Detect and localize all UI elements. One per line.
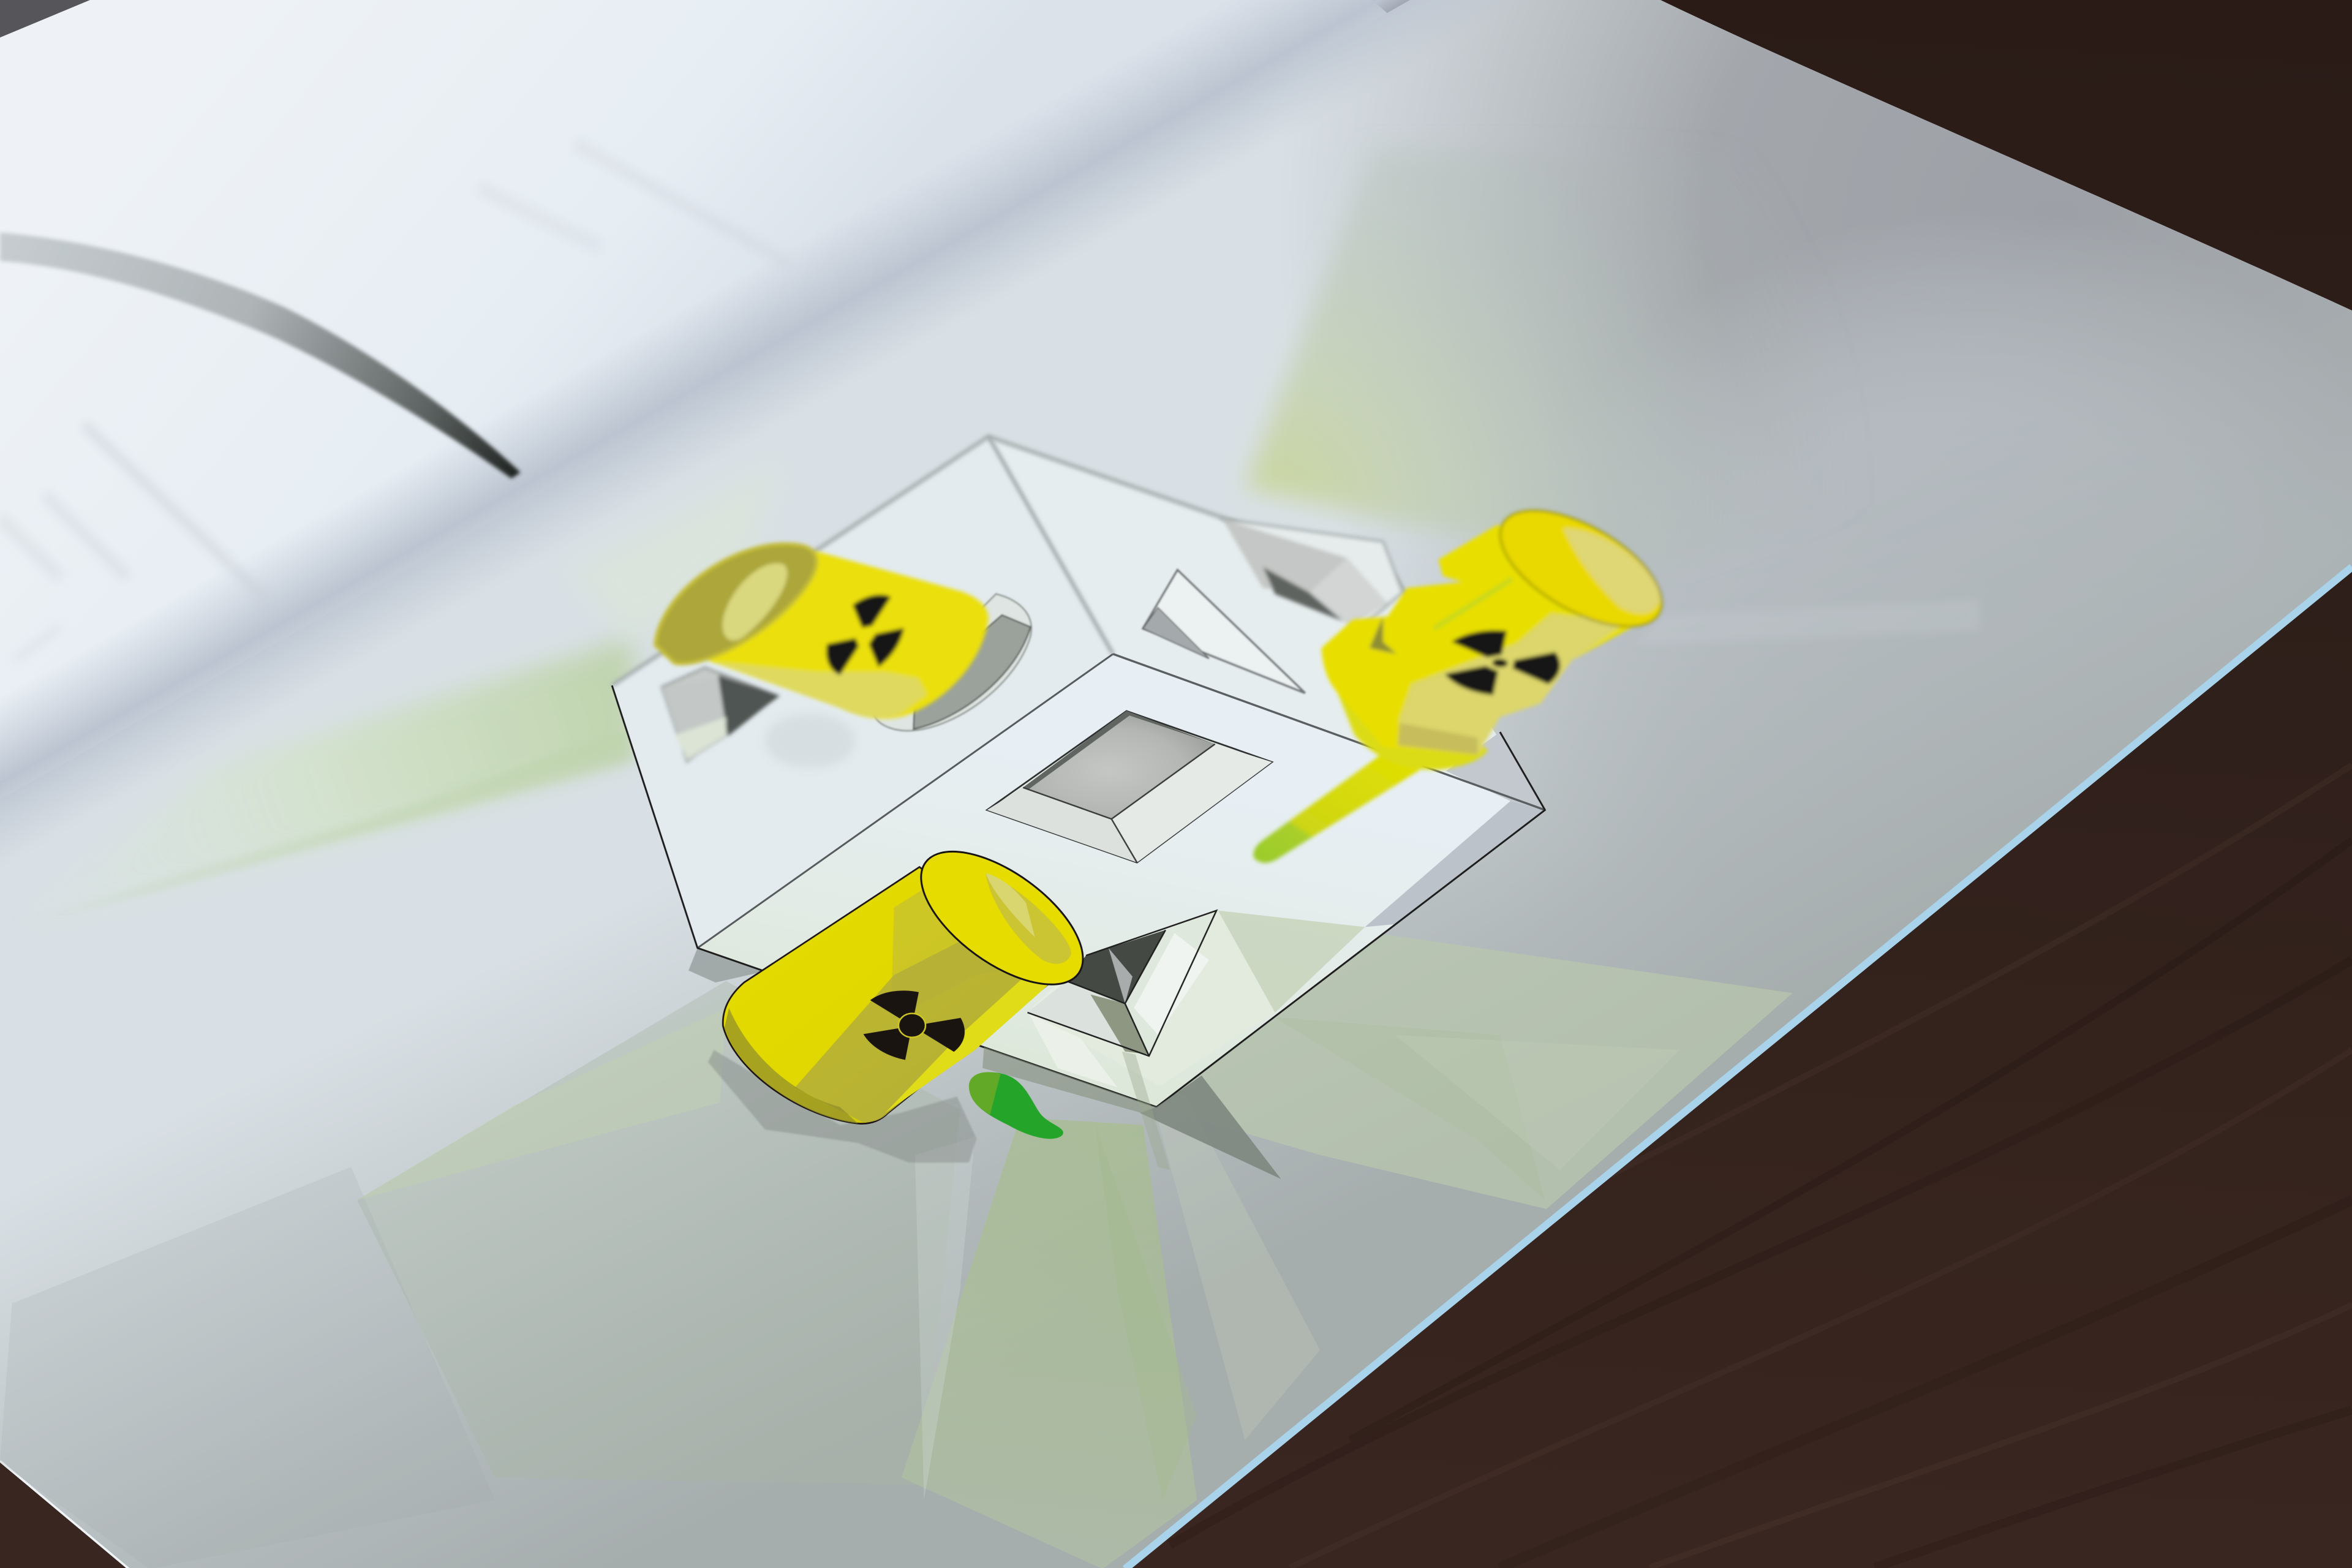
barrel 3 body — [723, 867, 1056, 1124]
barrel 3 lid — [899, 826, 1105, 1010]
pyramid grey beam — [1090, 995, 1149, 1055]
barrel cast shadow on page — [708, 1050, 976, 1163]
barrel 1: tilted barrel at upper left — [655, 545, 989, 718]
soft shadow of barrel 1 on the cube — [765, 714, 855, 768]
spill tail — [1253, 750, 1420, 863]
lower right green plane — [1155, 911, 1793, 1209]
left fan, stronger lower edge — [21, 728, 633, 925]
cube outlines — [612, 437, 1545, 1107]
blurred text columns on left page — [0, 144, 788, 660]
square pit on upper left face — [662, 668, 778, 762]
gutter shadow between pages — [0, 0, 1800, 1080]
barrel 3 shadow at base — [725, 1008, 858, 1123]
barrel 2: crushed barrel at upper right — [1253, 487, 1680, 863]
left page print marks — [0, 144, 788, 660]
barrel 1 lid — [655, 545, 816, 663]
soft grey beam right of crushed barrel — [1635, 600, 1980, 645]
circular hole on upper left face — [875, 594, 1031, 731]
crushed body — [1322, 525, 1638, 755]
triangular pyramid pit near bottom — [1028, 911, 1216, 1056]
square pit on lower face — [987, 711, 1272, 862]
isometric cube — [612, 437, 1545, 1107]
top right fan — [1245, 150, 2220, 568]
dented pale side — [1400, 614, 1626, 755]
barrel 1 highlight — [714, 662, 927, 717]
booklet left page — [0, 0, 1440, 840]
yellow puddle rim — [1336, 690, 1488, 770]
triangular pit on upper right face — [1143, 570, 1305, 693]
cube right wedges — [1365, 801, 1545, 927]
cube faces — [612, 437, 1113, 948]
lid — [1482, 487, 1680, 650]
blue page edge — [1125, 567, 2352, 1568]
bright light stripes over cube — [1029, 1014, 1117, 1088]
barrel 3: sharp barrel at front — [723, 826, 1105, 1124]
barrel 3 radiation symbol — [837, 982, 985, 1067]
lower left large parallelogram — [357, 981, 960, 1485]
barrel 3 translucent beam overlays — [891, 885, 1020, 1020]
pale glow above the left barrel — [570, 465, 780, 645]
cube under-edge shadow strip — [688, 948, 768, 982]
left fan, pale upper body — [21, 638, 633, 925]
green streak and dent — [1434, 579, 1512, 628]
square pit on upper right face — [1223, 519, 1403, 630]
bottom green fan — [902, 1117, 1197, 1568]
cube cast shadow wedge — [982, 1047, 1281, 1179]
radiation symbol — [1415, 620, 1584, 704]
blurred curved line on left page — [0, 233, 521, 478]
barrel 1 radiation symbol — [816, 586, 916, 683]
barrel 1 body — [655, 545, 989, 718]
green spill puddle — [969, 1072, 1063, 1139]
